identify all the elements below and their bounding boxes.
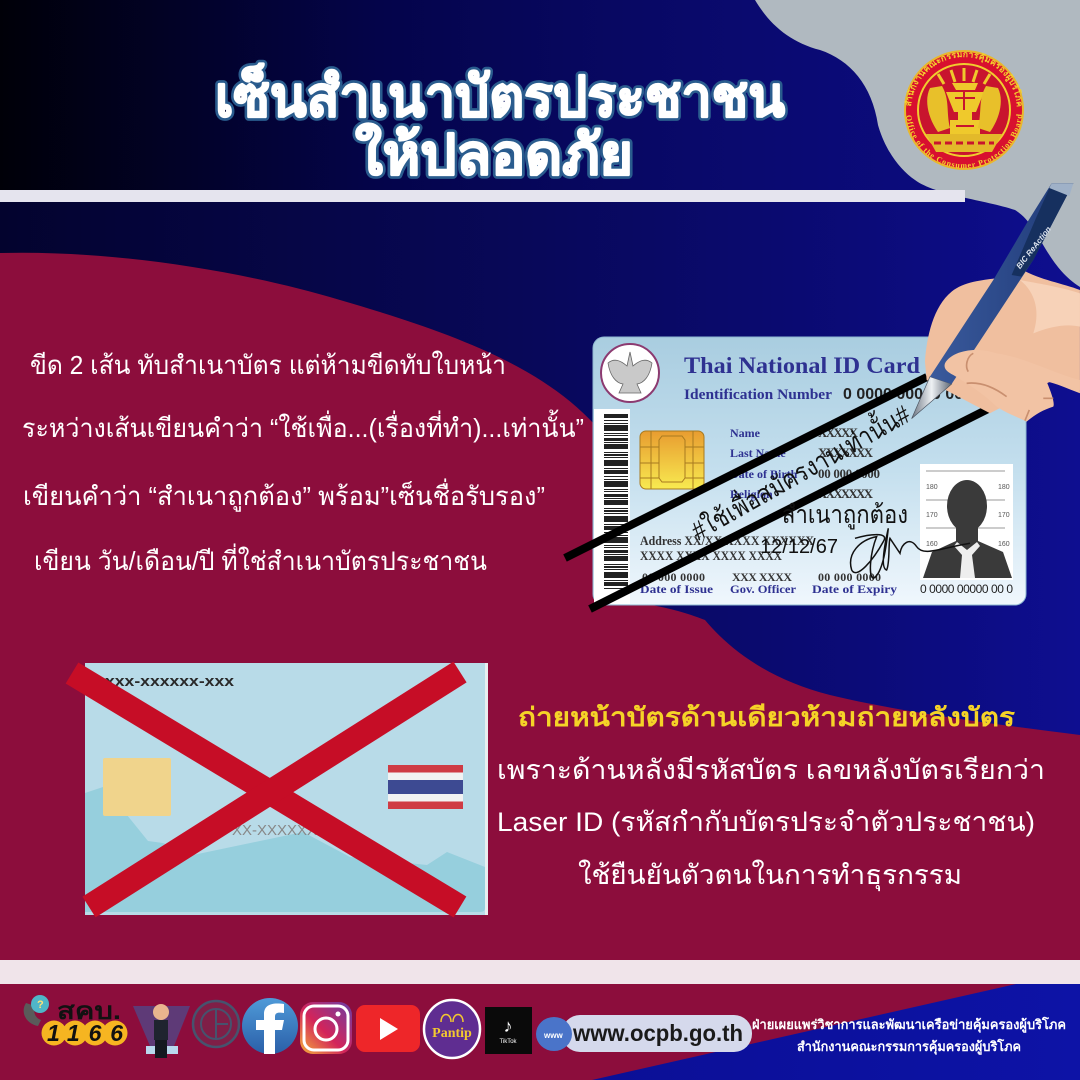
card fields: XXX XXXX xyxy=(732,570,792,584)
footer icon: youtube xyxy=(356,1005,420,1052)
card fields: XXXX XXXX XXXX XXXX xyxy=(640,548,783,563)
identification number: 0 0000 00000 00 0 xyxy=(843,386,977,403)
identification number xyxy=(684,386,977,403)
portrait silhouette: 180 xyxy=(998,484,1010,491)
card heading: Thai National ID Card xyxy=(684,353,920,378)
title: ให้ปลอดภัย xyxy=(355,122,633,186)
footer credits: สำนักงานคณะกรรมการคุ้มครองผู้บริโภค xyxy=(797,1038,1021,1055)
portrait silhouette: 160 xyxy=(926,541,938,548)
identification number: Identification Number xyxy=(684,387,833,403)
footer logo: circular emblem xyxy=(193,1001,239,1047)
card fields: 0 0000 00000 00 0 xyxy=(920,582,1013,596)
chip placeholder xyxy=(103,758,171,816)
handwritten date: 12/12/67 xyxy=(760,536,838,558)
hand holding pen xyxy=(912,183,1080,422)
ID card front xyxy=(593,337,1026,605)
title: เซ็นสำเนาบัตรประชาชน xyxy=(215,62,785,128)
handwritten signature xyxy=(851,528,970,578)
explanation text: เพราะด้านหลังมีรหัสบัตร เลขหลังบัตรเรียกว่า xyxy=(497,755,1045,785)
footer logo: hotline 1166: ? xyxy=(37,999,44,1011)
title: ให้ปลอดภัย xyxy=(355,122,633,186)
portrait silhouette: 170 xyxy=(998,512,1010,519)
explanation text: ใช้ยืนยันตัวตนในการทำธุรกรรม xyxy=(578,859,962,892)
footer website pill xyxy=(536,1015,752,1052)
footer website pill: www xyxy=(543,1031,563,1040)
card fields: 00 000 0000 xyxy=(818,466,880,481)
footer icon: instagram xyxy=(300,1002,352,1054)
footer band xyxy=(0,960,1080,1080)
warning heading: ถ่ายหน้าบัตรด้านเดียวห้ามถ่ายหลังบัตร xyxy=(518,702,1015,732)
chip xyxy=(640,431,704,489)
card fields: Name xyxy=(730,426,761,440)
black cross-out lines xyxy=(565,377,996,609)
pen label: BIC ReAction xyxy=(1014,225,1053,271)
instruction: draw two lines: ขีด 2 เส้น ทับสำเนาบัตร แต่ห้ามขีดทับใบหน้า xyxy=(30,350,506,380)
footer icon: tiktok xyxy=(485,1007,532,1054)
instruction: certified true copy and signature: เขียนคำว่า “สำเนาถูกต้อง” พร้อม”เซ็นชื่อรับรอง” xyxy=(23,478,545,512)
card fields: XXXXXXX xyxy=(818,445,874,460)
crossed-out card back xyxy=(72,663,488,915)
card fields: Last Name xyxy=(730,446,786,460)
instruction: write purpose between lines: ระหว่างเส้นเขียนคำว่า “ใช้เพื่อ...(เรื่องที่ทำ)...เท่านั้น” xyxy=(22,409,584,443)
footer icon: tiktok: TikTok xyxy=(499,1039,518,1045)
white stripe under title xyxy=(0,190,965,202)
pen clip xyxy=(1049,183,1073,196)
card fields: 00 000 0000 xyxy=(642,570,705,584)
card fields: Gov. Officer xyxy=(730,582,797,596)
instruction: write the date: เขียน วัน/เดือน/ปี ที่ใช่สำเนาบัตรประชาชน xyxy=(34,543,487,576)
thai flag xyxy=(388,765,463,809)
card fields: Religion xyxy=(730,487,773,501)
palm and thumb xyxy=(925,269,1080,413)
footer credits xyxy=(752,1016,1066,1055)
card fields: Date of Birth xyxy=(730,467,798,481)
garuda emblem xyxy=(601,344,659,402)
card body xyxy=(85,663,488,915)
card fields: Address XX/XX XXXX XXXXXX xyxy=(640,533,815,548)
logo: consumer protection board seal: สำนักงานคณะกรรมการคุ้มครองผู้บริโภค xyxy=(904,52,1022,107)
card fields: Date of Issue xyxy=(640,582,714,596)
maroon wave panel xyxy=(0,253,1080,960)
portrait silhouette: 180 xyxy=(926,484,938,491)
explanation text xyxy=(497,755,1045,892)
footer icon: pantip xyxy=(424,1000,480,1058)
portrait silhouette: 160 xyxy=(998,541,1010,548)
footer logo: hotline 1166: 1166 xyxy=(47,1020,123,1046)
footer website pill: www.ocpb.go.th xyxy=(572,1020,743,1046)
handwritten certified copy: สำเนาถูกต้อง xyxy=(782,501,908,530)
card right edge xyxy=(485,663,488,915)
footer icon: tiktok: ♪ xyxy=(504,1016,512,1036)
title xyxy=(215,62,785,186)
logo: consumer protection board seal: Office of the Consumer Protection Board xyxy=(906,114,1022,168)
handwritten purpose text: #ใช้เพื่อสมัครงานเท่านั้น# xyxy=(684,395,915,546)
explanation text: Laser ID (รหัสกำกับบัตรประจำตัวประชาชน) xyxy=(497,807,1035,837)
card fields: XXXXX xyxy=(818,425,859,440)
palm highlight xyxy=(1020,280,1080,333)
footer logo: hotline 1166 xyxy=(24,995,128,1046)
barcode xyxy=(594,409,630,604)
red cross xyxy=(72,672,460,907)
portrait silhouette: 170 xyxy=(926,512,938,519)
footer credits: ฝ่ายเผยแพร่วิชาการและพัฒนาเครือข่ายคุ้มครองผู้บริโภค xyxy=(752,1016,1066,1033)
title: เซ็นสำเนาบัตรประชาชน xyxy=(215,62,785,128)
pen upper dark section xyxy=(1012,183,1073,277)
card fields: 00 000 0000 xyxy=(818,570,881,584)
grey blob top right xyxy=(755,0,1080,287)
finger creases xyxy=(967,353,1053,421)
footer icon: presenter avatar xyxy=(133,1004,190,1058)
card fields xyxy=(640,425,1013,596)
card number: xxx-xxxxxx-xxx xyxy=(105,673,235,690)
faint laser id: XX-XXXXXX xyxy=(232,822,317,839)
pen body xyxy=(930,183,1073,384)
mountain background xyxy=(85,787,485,912)
portrait silhouette xyxy=(920,464,1013,580)
logo: consumer protection board seal xyxy=(904,50,1024,170)
index finger over pen xyxy=(945,350,1080,422)
card fields: Date of Expiry xyxy=(812,582,897,596)
footer icon: pantip: Pantip xyxy=(432,1026,472,1041)
pen metal tip xyxy=(912,377,952,419)
footer logo: hotline 1166: สคบ. xyxy=(57,998,121,1025)
card fields: XXXXXXX xyxy=(818,486,874,501)
footer icon: facebook xyxy=(242,998,298,1054)
